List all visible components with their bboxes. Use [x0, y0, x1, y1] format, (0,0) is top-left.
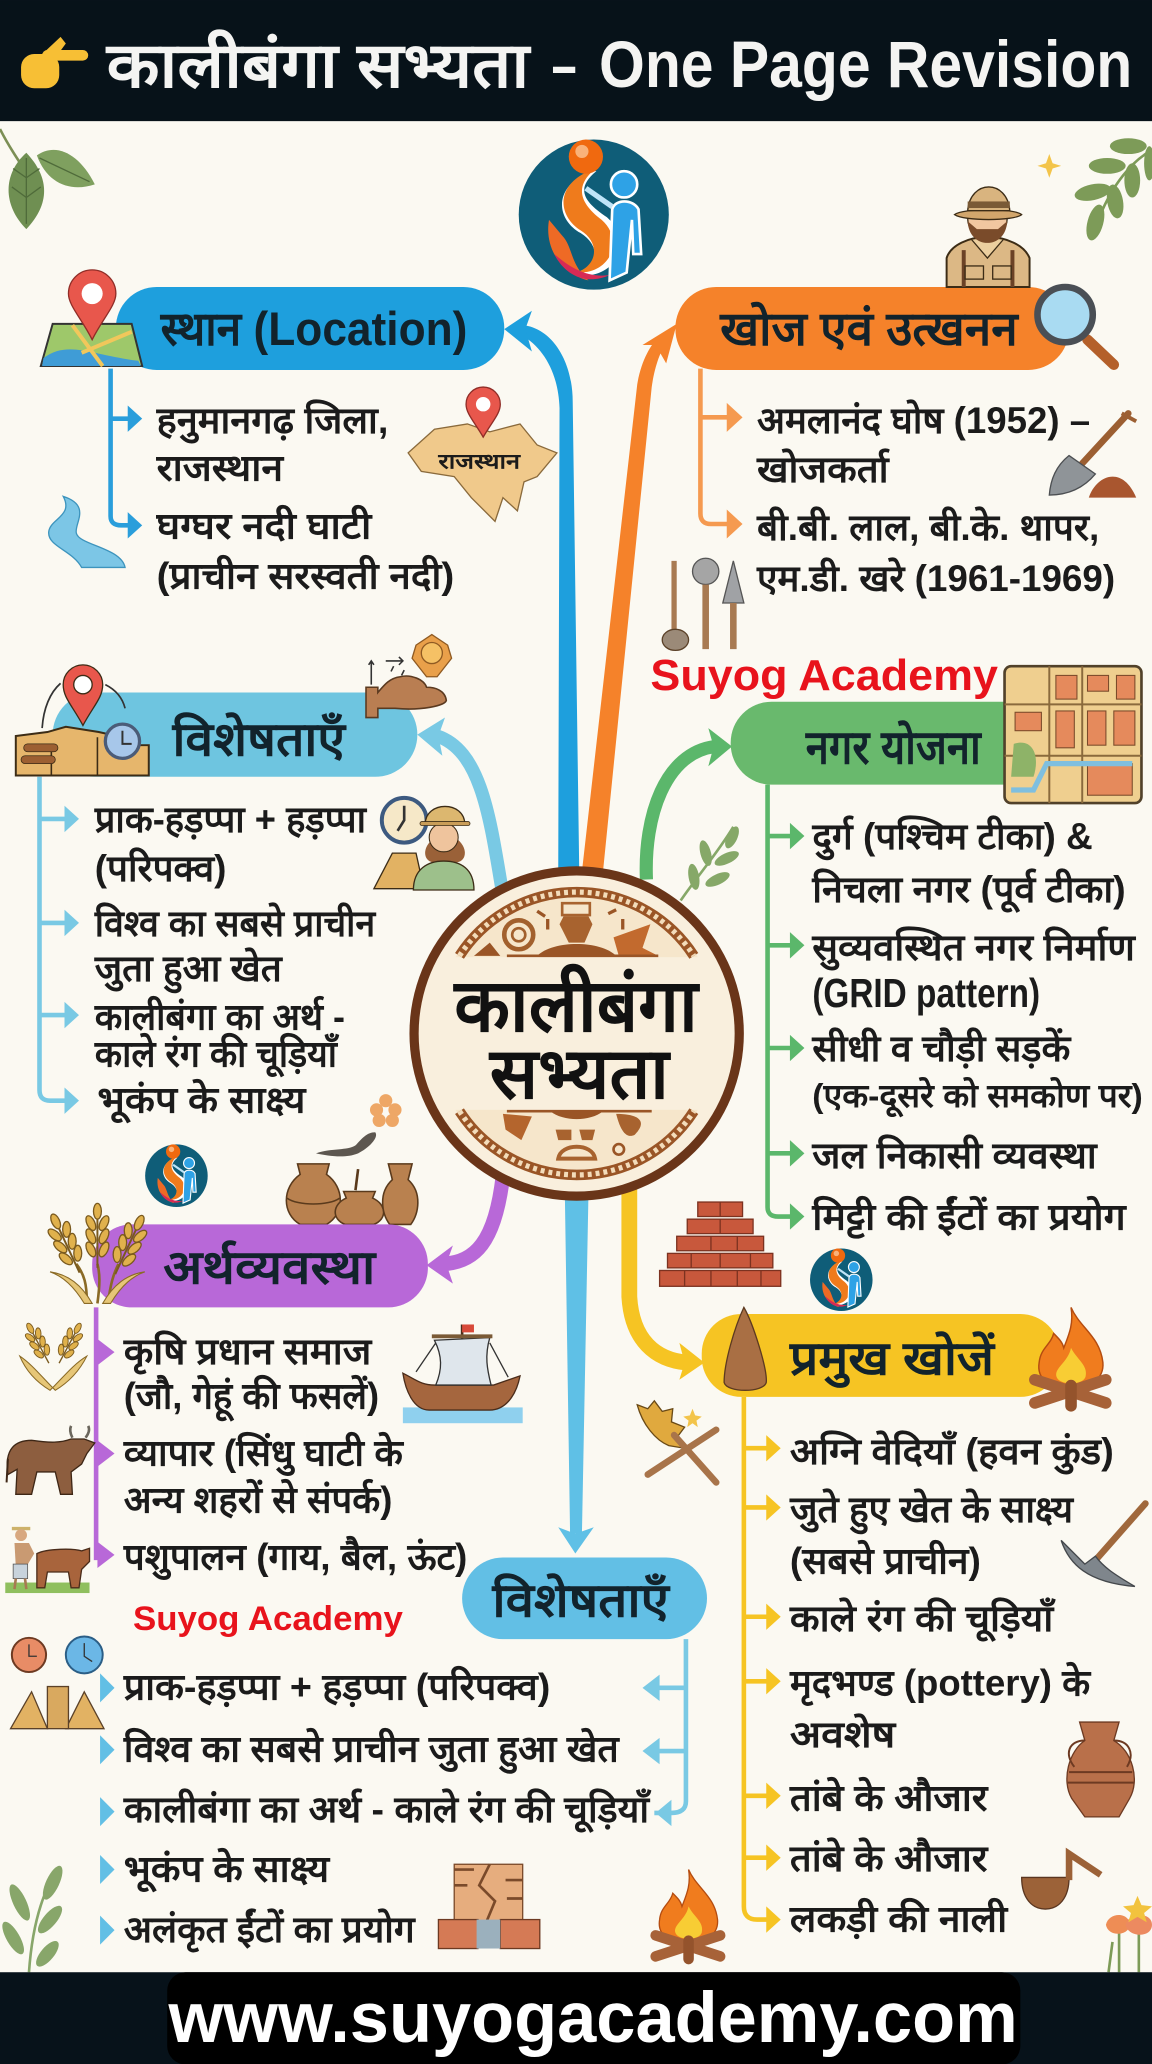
icon: trowel — [1049, 413, 1136, 498]
list text: (GRID pattern) — [812, 970, 1040, 1016]
list text: घग्घर नदी घाटी — [156, 504, 373, 546]
list text: विश्व का सबसे प्राचीन — [94, 902, 377, 944]
arrows — [766, 1435, 781, 1933]
connector: blue to location — [504, 311, 579, 876]
branch line — [768, 785, 793, 1217]
icon: flower — [370, 1094, 402, 1127]
list text: बी.बी. लाल, बी.के. थापर, — [756, 506, 1099, 548]
bottom motif band — [456, 1110, 698, 1176]
icon: site with pin and clock — [16, 665, 149, 775]
list text: अमलानंद घोष (1952) – — [757, 399, 1090, 441]
heading pill — [92, 1224, 428, 1307]
connector: orange to discovery — [582, 324, 677, 872]
hub title: सभ्यता — [488, 1035, 671, 1114]
icon: river — [49, 496, 125, 567]
icon: excavation soil and sun — [366, 635, 452, 718]
arrows — [65, 806, 79, 1114]
branch line — [111, 369, 132, 525]
central hub — [409, 866, 744, 1201]
title — [106, 27, 1132, 101]
list text: तांबे के औजार — [789, 1776, 989, 1818]
icon: wheat — [40, 1203, 155, 1303]
list text: अवशेष — [790, 1713, 897, 1755]
panel: economy — [5, 1203, 523, 1593]
list text: (जौ, गेहूं की फसलें) — [124, 1375, 379, 1423]
list text: (परिपक्व) — [95, 847, 226, 889]
list text: खोजकर्ता — [756, 448, 891, 490]
arrows — [727, 403, 743, 538]
branch line — [700, 369, 732, 524]
icon: pointing hand — [21, 37, 88, 88]
list text: (एक-दूसरे को समकोण पर) — [812, 1076, 1143, 1118]
icon: fire altar — [1035, 1307, 1106, 1406]
icon: Rajasthan map: राजस्थान — [437, 451, 522, 474]
heading pill — [702, 1314, 1060, 1397]
top motif band — [456, 891, 698, 957]
list text: हनुमानगढ़ जिला, — [156, 399, 388, 444]
list text — [811, 815, 1143, 1240]
list text: तांबे के औजार — [789, 1837, 989, 1879]
heading text: विशेषताएँ — [171, 712, 347, 767]
branch line — [744, 1397, 770, 1920]
list text: कालीबंगा का अर्थ - — [94, 996, 345, 1038]
branch line — [39, 777, 68, 1101]
list text: व्यापार (सिंधु घाटी के — [123, 1431, 405, 1476]
icon: clay pot — [1067, 1722, 1134, 1817]
small logo right — [810, 1248, 873, 1311]
list text: अन्य शहरों से संपर्क) — [124, 1479, 392, 1521]
icon: clocks and pyramids — [11, 1637, 104, 1729]
heading pill — [53, 693, 417, 777]
panel: major discoveries — [637, 1307, 1145, 1959]
header banner — [0, 0, 1152, 121]
heading pill — [116, 287, 504, 370]
list text — [756, 399, 1115, 599]
list text: राजस्थान — [156, 448, 285, 489]
panel: discovery and excavation — [662, 187, 1136, 650]
icon: clay pots — [286, 1164, 418, 1224]
website url: www.suyogacademy.com — [168, 1979, 1018, 2058]
icon: excavation tools — [662, 558, 744, 650]
icon: pickaxe — [1061, 1504, 1145, 1586]
icon: cow — [7, 1426, 95, 1494]
list text: पशुपालन (गाय, बैल, ऊंट) — [123, 1535, 467, 1580]
watermark: Suyog Academy lower: Suyog Academy — [133, 1600, 403, 1638]
heading text: अर्थव्यवस्था — [163, 1240, 377, 1295]
arrows — [128, 406, 142, 538]
icon: city map — [1005, 666, 1141, 803]
icon: sparkle — [1037, 154, 1061, 178]
list text: सीधी व चौड़ी सड़कें — [811, 1027, 1072, 1069]
icon: archaeologist with clock — [374, 798, 474, 890]
list text: काले रंग की चूड़ियाँ — [789, 1597, 1056, 1642]
heading pill — [462, 1558, 707, 1639]
decorative plant bottom left — [0, 1863, 66, 1972]
title: कालीबंगा सभ्यता — [106, 29, 532, 101]
connector: green to town planning — [646, 728, 732, 879]
list text: मृदभण्ड (pottery) के — [789, 1662, 1092, 1707]
decorative flowers bottom right — [1106, 1896, 1152, 1972]
list text: अलंकृत ईंटों का प्रयोग — [124, 1908, 416, 1953]
icon: ladle — [1022, 1854, 1101, 1909]
list text: निचला नगर (पूर्व टीका) — [811, 868, 1126, 913]
bullets — [100, 1673, 115, 1945]
icon: magnifier — [1037, 287, 1114, 365]
list text: (सबसे प्राचीन) — [790, 1539, 981, 1581]
list text: कालीबंगा का अर्थ - काले रंग की चूड़ियाँ — [123, 1788, 652, 1833]
decorative leaves top left — [0, 129, 95, 229]
title: – — [552, 31, 577, 101]
icon: cracked bricks — [438, 1864, 540, 1949]
list text: जुते हुए खेत के साक्ष्य — [789, 1488, 1075, 1535]
list text — [123, 1666, 652, 1953]
heading pill — [731, 702, 1060, 785]
list text: अग्नि वेदियाँ (हवन कुंड) — [790, 1430, 1114, 1475]
list text: भूकंप के साक्ष्य — [124, 1847, 331, 1892]
heading text: नगर योजना — [805, 720, 982, 775]
list text — [94, 799, 377, 1124]
heading text: स्थान (Location) — [160, 303, 467, 356]
arrows — [97, 1339, 115, 1568]
panel: features lower — [11, 1558, 707, 1953]
list text: विश्व का सबसे प्राचीन जुता हुआ खेत — [123, 1728, 621, 1775]
list text — [156, 399, 454, 597]
connector: purple to economy — [427, 1176, 503, 1284]
icon: farmer with cattle — [5, 1529, 90, 1593]
list text — [789, 1430, 1114, 1939]
small logo left — [145, 1144, 208, 1207]
heading text: विशेषताएँ — [491, 1573, 671, 1628]
icon: Rajasthan map — [408, 387, 557, 521]
connector: yellow to discoveries — [629, 1185, 704, 1380]
list text: लकड़ी की नाली — [789, 1897, 1009, 1939]
icon: campfire — [656, 1870, 720, 1959]
list text: जल निकासी व्यवस्था — [811, 1134, 1098, 1176]
list text: कृषि प्रधान समाज — [123, 1330, 373, 1375]
list text: काले रंग की चूड़ियाँ — [94, 1032, 340, 1077]
panel: town planning — [681, 666, 1143, 1240]
right arrows — [642, 1675, 671, 1826]
hub title — [452, 963, 701, 1114]
arrows — [790, 823, 804, 1230]
footer banner — [0, 1972, 1152, 2064]
list text: प्राक-हड़प्पा + हड़प्पा — [94, 799, 367, 840]
decorative leaves top right — [1073, 138, 1152, 242]
list text: जुता हुआ खेत — [94, 947, 284, 994]
heading text: प्रमुख खोजें — [789, 1331, 996, 1389]
connector: light blue down to features — [558, 1192, 594, 1554]
panel: features left — [16, 635, 474, 1124]
icon: wheat small — [19, 1319, 89, 1390]
list text: दुर्ग (पश्चिम टीका) & — [811, 815, 1093, 861]
branch line — [94, 1307, 98, 1560]
list text: सुव्यवस्थित नगर निर्माण — [811, 926, 1136, 971]
panel: location — [41, 270, 557, 597]
icon: archaeologist — [947, 187, 1030, 287]
icon: map with pin — [41, 270, 142, 366]
list text: (प्राचीन सरस्वती नदी) — [157, 555, 454, 597]
heading text: खोज एवं उत्खनन — [719, 301, 1019, 356]
hub title: कालीबंगा — [452, 963, 701, 1047]
heading pill — [675, 287, 1069, 370]
icon: bricks stack — [660, 1202, 781, 1286]
list text — [123, 1330, 467, 1580]
icon: leaf and crossed tools — [637, 1401, 716, 1482]
icon: bird — [316, 1132, 376, 1156]
connector: light blue to features — [417, 718, 502, 887]
watermark: Suyog Academy: Suyog Academy — [650, 652, 998, 700]
icon: clay cone — [724, 1307, 766, 1390]
list text: प्राक-हड़प्पा + हड़प्पा (परिपक्व) — [123, 1666, 550, 1708]
list text: एम.डी. खरे (1961-1969) — [756, 557, 1115, 599]
list text: मिट्टी की ईंटों का प्रयोग — [811, 1196, 1127, 1240]
branch line — [652, 1639, 686, 1813]
main logo — [519, 140, 669, 290]
list text: भूकंप के साक्ष्य — [97, 1079, 307, 1124]
icon: boat — [403, 1324, 523, 1423]
icon: branch — [681, 824, 742, 901]
